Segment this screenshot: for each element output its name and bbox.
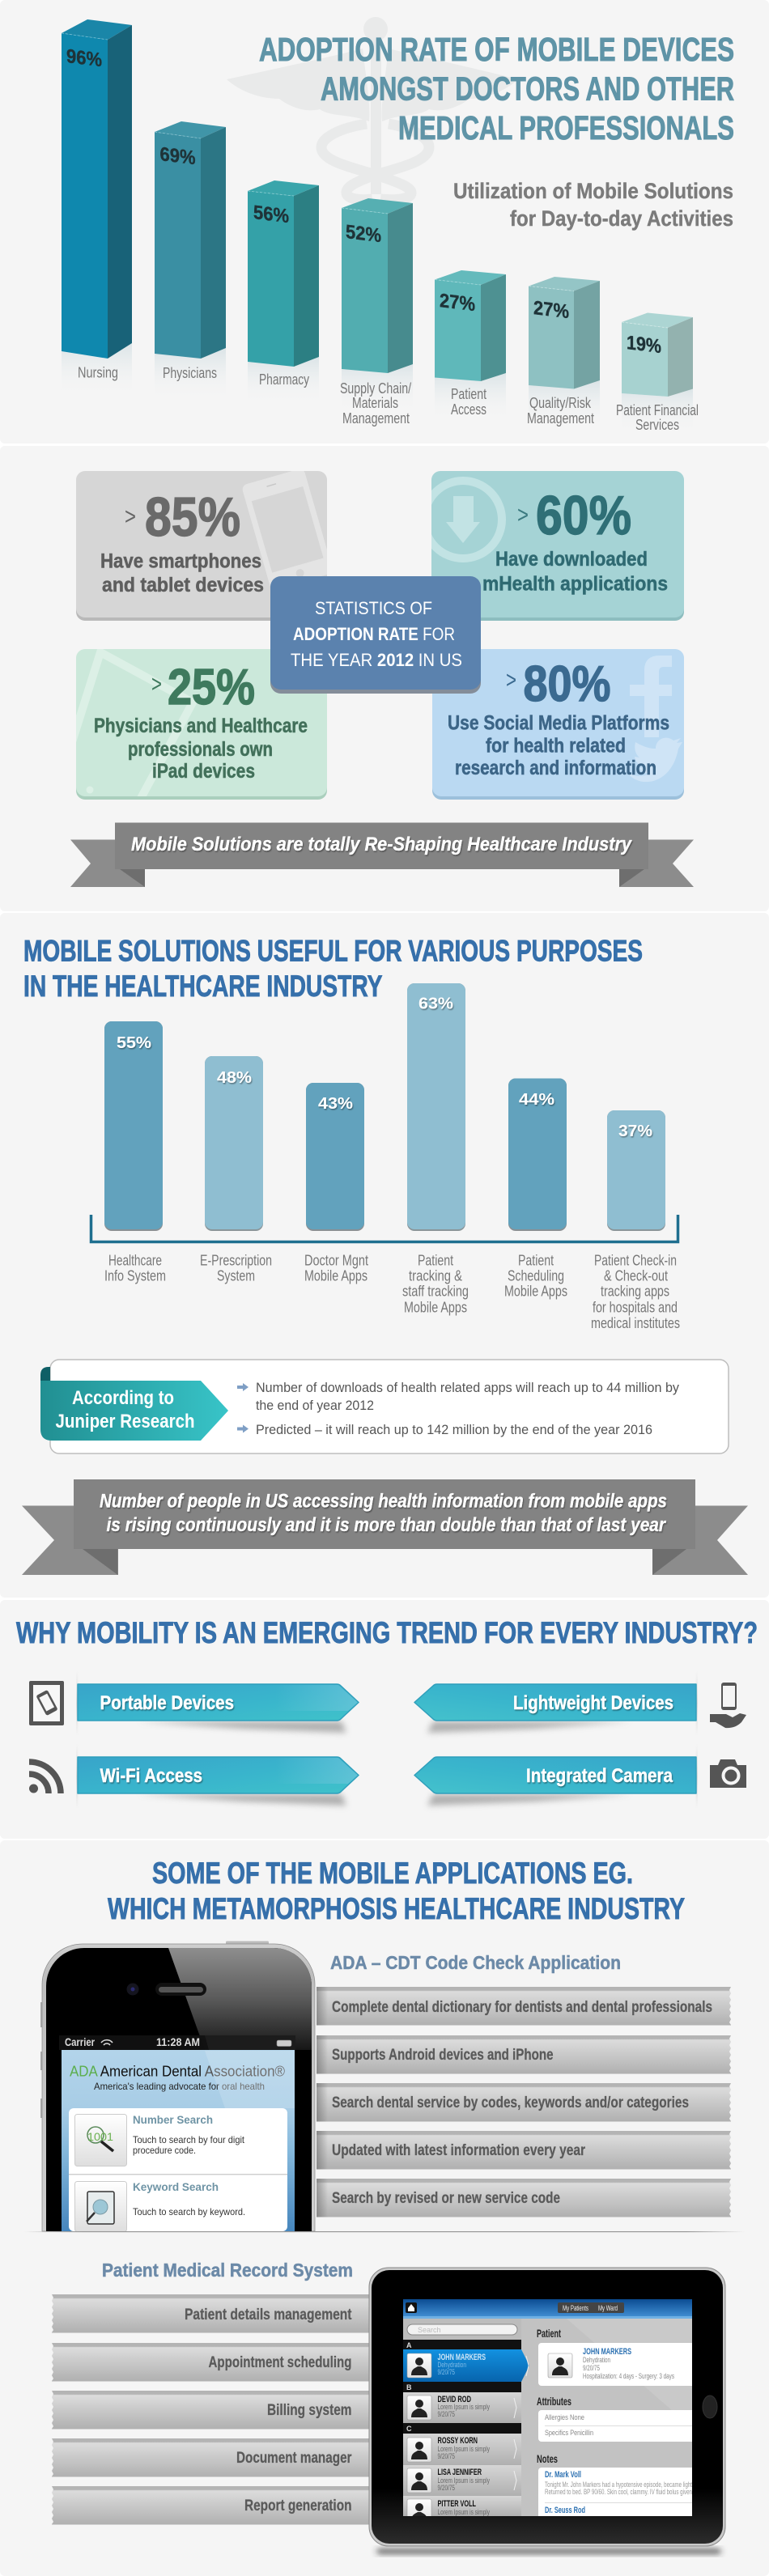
card: smartphones 85% [76,468,334,621]
icon: phone watermark [243,471,327,586]
subheading: utilization: Utilization of Mobile Solutions [453,179,733,203]
bar labels: Management [342,410,410,427]
icon: download arrow watermark [424,481,502,558]
ribbon: re-shaping healthcare: Mobile Solutions are totally Re-Shaping Healthcare Industry [131,834,632,855]
heading: adoption rate [259,31,734,146]
bar labels: Services [635,417,679,433]
patient detail column: JOHN MARKERS [583,2347,631,2357]
feature bar: patient details [52,2294,369,2332]
card: iPad 25% [71,649,327,801]
callout: juniper research: Number of downloads of health related apps will reach up to 44 million by [256,1380,679,1395]
category labels: medical institutes [591,1315,680,1331]
bullet arrow 2 [237,1424,249,1432]
card: iPad 25%: professionals own [128,738,273,761]
patient detail column [537,2329,692,2516]
banner: portable devices [78,1684,359,1721]
patient detail column: Returned to bed. BP 90/60. Skin cool, clammy. IV fluid bolus given [545,2488,692,2496]
bar: healthcare info system 55%: 55% [117,1034,151,1052]
feature bar: billing [52,2391,369,2430]
device: phone with ADA app: Touch to search by four digit [133,2134,245,2145]
tablet screen: B [406,2383,412,2391]
category labels: Healthcare [108,1253,162,1269]
icon: tablet [29,1681,64,1725]
callout: juniper research: Juniper Research [55,1411,194,1432]
ribbon: number of people [22,1479,748,1575]
patient detail column: Dehydration [583,2356,610,2364]
bar labels: Supply Chain/ [340,380,411,397]
center box: statistics [270,576,481,694]
icons: facebook and twitter watermark [627,656,682,782]
card: social media 80%: research and information [455,757,656,779]
chart axis bracket [91,1215,678,1241]
patient rows: Dehydration [437,2361,466,2369]
bar: healthcare info system 55% [104,1021,163,1231]
feature bar: android: Supports Android devices and iPhone [332,2047,554,2064]
tablet screen: A [406,2341,412,2349]
bar: patient check-in 37% [607,1110,665,1231]
patient rows: Lorem Ipsum is simply [437,2445,490,2453]
device: phone with ADA app: America's leading advocate for oral health [94,2081,265,2092]
3D bar: physicians 69% [155,121,226,359]
patient detail column: Patient [537,2327,561,2340]
patient detail column: Specifics Penicillin [545,2429,593,2437]
banner: wi-fi access [78,1757,359,1793]
banner edge fades [76,1671,698,1809]
panel: mobile applications [0,1840,769,2576]
3D bar: quality risk 27% [529,277,600,388]
3D bar: patient access 27%: 27% [440,290,475,316]
category labels: for hospitals and [593,1300,678,1316]
callout: juniper research: the end of year 2012 [256,1398,374,1413]
icon: phone on hand [710,1683,746,1728]
card: mHealth 60%: mHealth applications [482,573,668,596]
feature bar: android [317,2035,731,2073]
3D bar: pharmacy 56%: 56% [253,202,289,227]
category labels: tracking apps [601,1284,669,1300]
category labels: Mobile Apps [304,1268,368,1284]
patient rows: LISA JENNIFER [437,2468,482,2477]
ribbon: re-shaping healthcare [70,822,694,887]
heading: some of the mobile applications [108,1857,685,1925]
feature bar: updated: Updated with latest information every year [332,2142,585,2159]
bar: patient tracking 63%: 63% [418,995,453,1013]
center box: statistics: THE YEAR 2012 IN US [291,650,462,670]
heading: ADA CDT: ADA – CDT Code Check Application [330,1952,621,1973]
card: iPad 25%: Physicians and Healthcare [94,715,308,737]
category labels: Info System [104,1268,166,1284]
bar labels: Materials [352,395,398,411]
category labels: E-Prescription [200,1253,272,1269]
subheading: utilization [453,179,733,231]
center box: statistics: STATISTICS OF [315,598,432,618]
banner: wi-fi access: Wi-Fi Access [100,1765,202,1787]
panel: adoption rate chart [0,0,769,443]
card: social media 80%: Use Social Media Platforms [448,712,669,735]
3D bar: nursing 96%: 96% [66,45,102,71]
3D bar: supply chain 52% [342,198,413,373]
feature bar: appointment: Appointment scheduling [209,2354,351,2371]
patient rows: DEVID ROD [437,2395,471,2404]
category labels: Patient Check-in [594,1253,677,1269]
feature bar: revised: Search by revised or new service code [332,2190,560,2207]
icon: number magnifier [87,2127,113,2151]
category labels: tracking & [409,1268,462,1284]
bar labels: Quality/Risk [529,395,592,411]
callout: juniper research: According to [72,1387,174,1409]
patient detail column: Allergies None [545,2413,584,2421]
bar: doctor mgnt 43%: 43% [318,1095,353,1113]
bar labels: Access [451,401,486,418]
bar: patient check-in 37%: 37% [618,1122,652,1140]
bar: patient scheduling 44%: 44% [519,1091,554,1109]
callout: juniper research: Predicted – it will reach up to 142 million by the end of the year 2016 [256,1422,652,1437]
bar labels [78,364,699,433]
patient rows: 9/20/75 [437,2368,455,2376]
card: iPad 25%: > [151,671,162,698]
3D bar: quality risk 27%: 27% [533,297,569,323]
device: phone with ADA app: Keyword Search [133,2180,219,2193]
3D bar: pharmacy 56% [248,180,319,367]
panel: why mobility [0,1600,769,1839]
bar: e-prescription 48% [205,1056,263,1231]
icon: number magnifier: 1001 [87,2130,113,2143]
feature bar: document manager [52,2438,369,2476]
watermark: caduceus [227,17,518,200]
card: iPad 25%: 25% [168,660,255,715]
category labels: Mobile Apps [404,1300,467,1316]
3D bar: nursing 96% [62,19,132,359]
tablet screen [403,2299,700,2524]
patient detail column: Dr. Mark Voll [545,2470,581,2480]
card: mHealth 60%: 60% [536,485,631,546]
tablet screen: Search [418,2326,441,2334]
patient detail column: Tonight Mr. John Markers had a hypotensive episode, became light [545,2481,692,2489]
panel: statistics of adoption rate [0,446,769,911]
feature bar: appointment [52,2343,369,2381]
bar: patient tracking 63% [407,983,465,1231]
banner: portable devices: Portable Devices [100,1692,234,1714]
feature bar: billing: Billing system [267,2402,351,2419]
bar: doctor mgnt 43% [306,1083,364,1231]
card: social media 80% [432,649,684,800]
bar reflections [62,343,693,433]
patient rows: JOHN MARKERS [437,2353,486,2362]
feature bar: updated [317,2131,731,2169]
feature bar: dental dictionary [317,1987,731,2025]
tablet screen: My Patients [563,2304,588,2312]
banner: lightweight devices: Lightweight Devices [513,1692,673,1714]
bar labels: Management [527,410,594,427]
patient rows: PITTER VOLL [437,2499,476,2509]
category labels: System [217,1268,255,1284]
icon: rss wifi [29,1762,61,1793]
patient rows: Lorem Ipsum is simply [437,2476,490,2485]
icon: camera [710,1759,746,1788]
feature bar: patient details: Patient details management [185,2307,352,2323]
3D bar: patient financial 19%: 19% [627,332,661,358]
divider line [24,2231,745,2232]
bar labels: Patient [451,386,486,402]
tablet screen: C [406,2425,412,2433]
banner: integrated camera [414,1757,696,1793]
patient detail column: 9/20/75 [583,2364,600,2372]
device: tablet with patient record app [369,2268,725,2553]
card: smartphones 85%: > [125,503,136,530]
category labels: & Check-out [604,1268,668,1284]
feature bar: document manager: Document manager [236,2450,352,2467]
card: mHealth 60%: Have downloaded [495,548,648,571]
device: phone with ADA app: procedure code. [133,2145,196,2156]
patient rows: 9/20/75 [437,2484,455,2492]
callout: juniper research [40,1360,729,1454]
3D bar: patient financial 19% [622,312,693,397]
patient detail column: Dr. Seuss Rod [545,2506,585,2515]
patient detail column: Attributes [537,2395,571,2408]
feature bar: search codes [317,2083,731,2122]
patient rows: Lorem Ipsum is simply [437,2403,490,2411]
patient rows: 9/20/75 [437,2452,455,2460]
heading: some of the mobile applications: SOME OF THE MOBILE APPLICATIONS EG. [152,1857,633,1890]
device: phone with ADA app: Touch to search by keyword. [133,2206,245,2217]
feature bar: search codes: Search dental service by codes, keywords and/or categories [332,2094,689,2111]
panel: mobile solutions purposes [0,913,769,1598]
category labels: Patient [518,1253,554,1269]
patient rows: Lorem Ipsum is simply [437,2508,490,2516]
card: mHealth 60% [424,471,684,621]
device: phone with ADA app [40,1941,315,2232]
center box: statistics: ADOPTION RATE FOR [293,624,455,644]
device: phone with ADA app: Number Search [133,2113,213,2126]
3D bar: patient access 27% [435,270,506,381]
category labels: Scheduling [508,1268,564,1284]
card: social media 80%: 80% [523,656,610,712]
bar labels: Pharmacy [259,371,309,388]
3D bar: supply chain 52%: 52% [346,221,381,247]
icon: keyword book [87,2192,114,2224]
card: smartphones 85%: 85% [145,486,240,548]
category labels: Patient [418,1253,453,1269]
ribbon: number of people: is rising continuously and it is more than double than that of last year [107,1514,666,1536]
3D bar: physicians 69%: 69% [160,143,196,169]
card: smartphones 85%: and tablet devices [102,574,264,596]
category labels: Mobile Apps [504,1284,567,1300]
subheading: utilization: for Day-to-day Activities [510,206,733,231]
banner shadows [138,1721,631,1806]
category labels [104,1253,680,1331]
bar labels: Nursing [78,364,118,380]
bar labels: Patient Financial [616,402,699,418]
category labels: staff tracking [402,1284,469,1300]
card: social media 80%: for health related [486,735,626,758]
heading: patient medical record: Patient Medical Record System [102,2260,353,2281]
card: iPad 25%: iPad devices [152,760,255,783]
device: phone with ADA app: 11:28 AM [156,2035,200,2048]
patient rows: 9/20/75 [437,2410,455,2418]
ribbon: number of people: Number of people in US accessing health information from mobile apps [100,1491,667,1512]
feature bar: report generation [52,2486,369,2525]
bullet arrow 1 [237,1383,249,1391]
bar: patient scheduling 44% [508,1078,567,1231]
patient detail column: Notes [537,2452,558,2465]
feature bar: revised [317,2179,731,2217]
device: phone with ADA app: ADA American Dental Association® [70,2064,285,2080]
banner: integrated camera: Integrated Camera [526,1765,673,1787]
category labels: Doctor Mgnt [304,1253,368,1269]
heading: mobile solutions useful: IN THE HEALTHCARE INDUSTRY [23,970,383,1003]
heading: mobile solutions useful [23,934,643,1003]
card: smartphones 85%: Have smartphones [100,550,261,573]
card: social media 80%: > [506,667,516,694]
card: mHealth 60%: > [517,502,529,528]
patient rows [407,2353,529,2523]
bar labels: Physicians [163,365,217,381]
banner: lightweight devices [414,1684,696,1721]
tablet screen: My Ward [598,2304,618,2312]
device: phone with ADA app: Carrier [65,2035,95,2048]
patient rows: ROSSY KORN [437,2436,478,2446]
icon: tablet watermark [71,652,193,801]
patient detail column: Hospitalization: 4 days - Surgery: 3 days [583,2372,674,2380]
bar: e-prescription 48%: 48% [217,1069,252,1087]
feature bar: report generation: Report generation [244,2497,351,2514]
